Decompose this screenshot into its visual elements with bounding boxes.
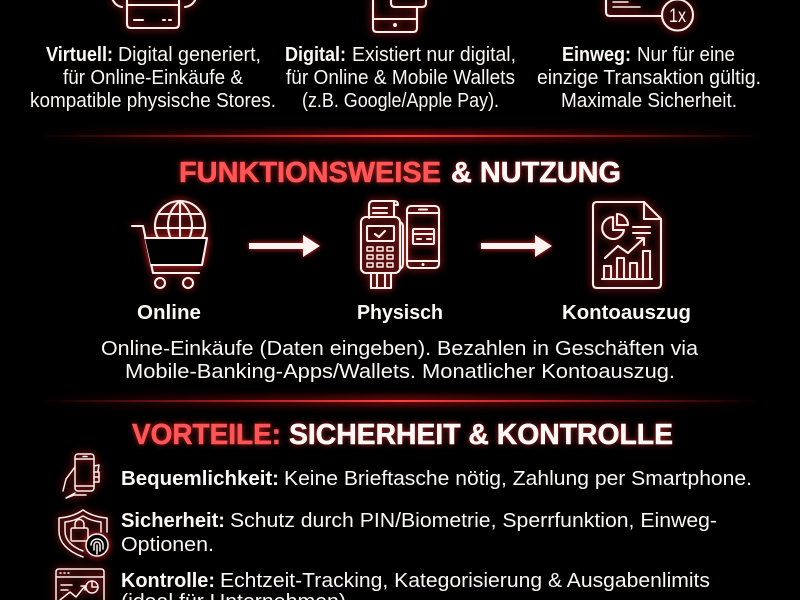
text: Kontrolle: Echtzeit-Tracking, Kategorisierung & Ausgabenlimits [220, 570, 710, 592]
icon: virtual card [112, 0, 196, 28]
text: Einweg: Maximale Sicherheit. [561, 90, 737, 112]
text: Sicherheit: Sicherheit: [121, 510, 225, 532]
icon: analytics dashboard [56, 569, 104, 600]
text: Einweg: Einweg: [562, 44, 631, 66]
icon: single-use ticket [606, 0, 693, 30]
heading: Funktionsweise & Nutzung: & NUTZUNG [451, 157, 621, 189]
text: usage description: Online-Einkäufe (Daten eingeben). Bezahlen in Geschäften via [101, 338, 699, 360]
heading: Vorteile [132, 419, 673, 451]
text: usage description [101, 338, 699, 383]
text: Sicherheit: Optionen. [121, 534, 214, 556]
text: Sicherheit [121, 510, 717, 556]
text: Virtuell [30, 44, 276, 112]
text: Sicherheit: Schutz durch PIN/Biometrie, Sperrfunktion, Einweg- [230, 510, 717, 532]
text: Einweg: Nur für eine [637, 44, 735, 66]
text: Virtuell: Digital generiert, [118, 44, 261, 66]
text: Digital: Digital: [285, 44, 346, 66]
icon: account statement document [593, 202, 661, 288]
text: Digital: (z.B. Google/Apple Pay). [302, 90, 499, 112]
text: Kontrolle [121, 570, 710, 600]
icon: single-use ticket: 1x [669, 6, 686, 27]
arrow: physical to statement [481, 235, 552, 257]
icon: digital phone [373, 0, 426, 32]
text: Bequemlichkeit: Keine Brieftasche nötig, Zahlung per Smartphone. [284, 468, 752, 490]
text: Virtuell: kompatible physische Stores. [30, 90, 276, 112]
arrow: online to physical [249, 235, 320, 257]
icon: shield with lock and fingerprint [59, 510, 108, 557]
icon: payment terminal and phone [361, 201, 439, 288]
text: Einweg [537, 44, 761, 112]
icon: shopping cart with globe [132, 201, 207, 288]
text: usage description: Mobile-Banking-Apps/Wallets. Monatlicher Kontoauszug. [125, 361, 675, 383]
text: Digital [285, 44, 516, 112]
text: Virtuell: Virtuell: [46, 44, 113, 66]
heading: Funktionsweise & Nutzung [179, 157, 621, 189]
label: Physisch: Physisch [357, 302, 443, 324]
text: Digital: Existiert nur digital, [352, 44, 516, 66]
heading: Vorteile: VORTEILE: [132, 419, 281, 451]
label: Kontoauszug: Kontoauszug [562, 302, 691, 324]
heading: Vorteile: SICHERHEIT & KONTROLLE [289, 419, 673, 451]
text: Digital: für Online & Mobile Wallets [286, 67, 515, 89]
label: Online: Online [137, 302, 201, 324]
text: Kontrolle: Kontrolle: [121, 570, 215, 592]
heading: Funktionsweise & Nutzung: FUNKTIONSWEISE [179, 157, 441, 189]
text: Virtuell: für Online-Einkäufe & [63, 67, 244, 89]
text: Bequemlichkeit: Bequemlichkeit: [121, 468, 279, 490]
icon: hand holding smartphone [63, 454, 99, 498]
text: Einweg: einzige Transaktion gültig. [537, 67, 761, 89]
